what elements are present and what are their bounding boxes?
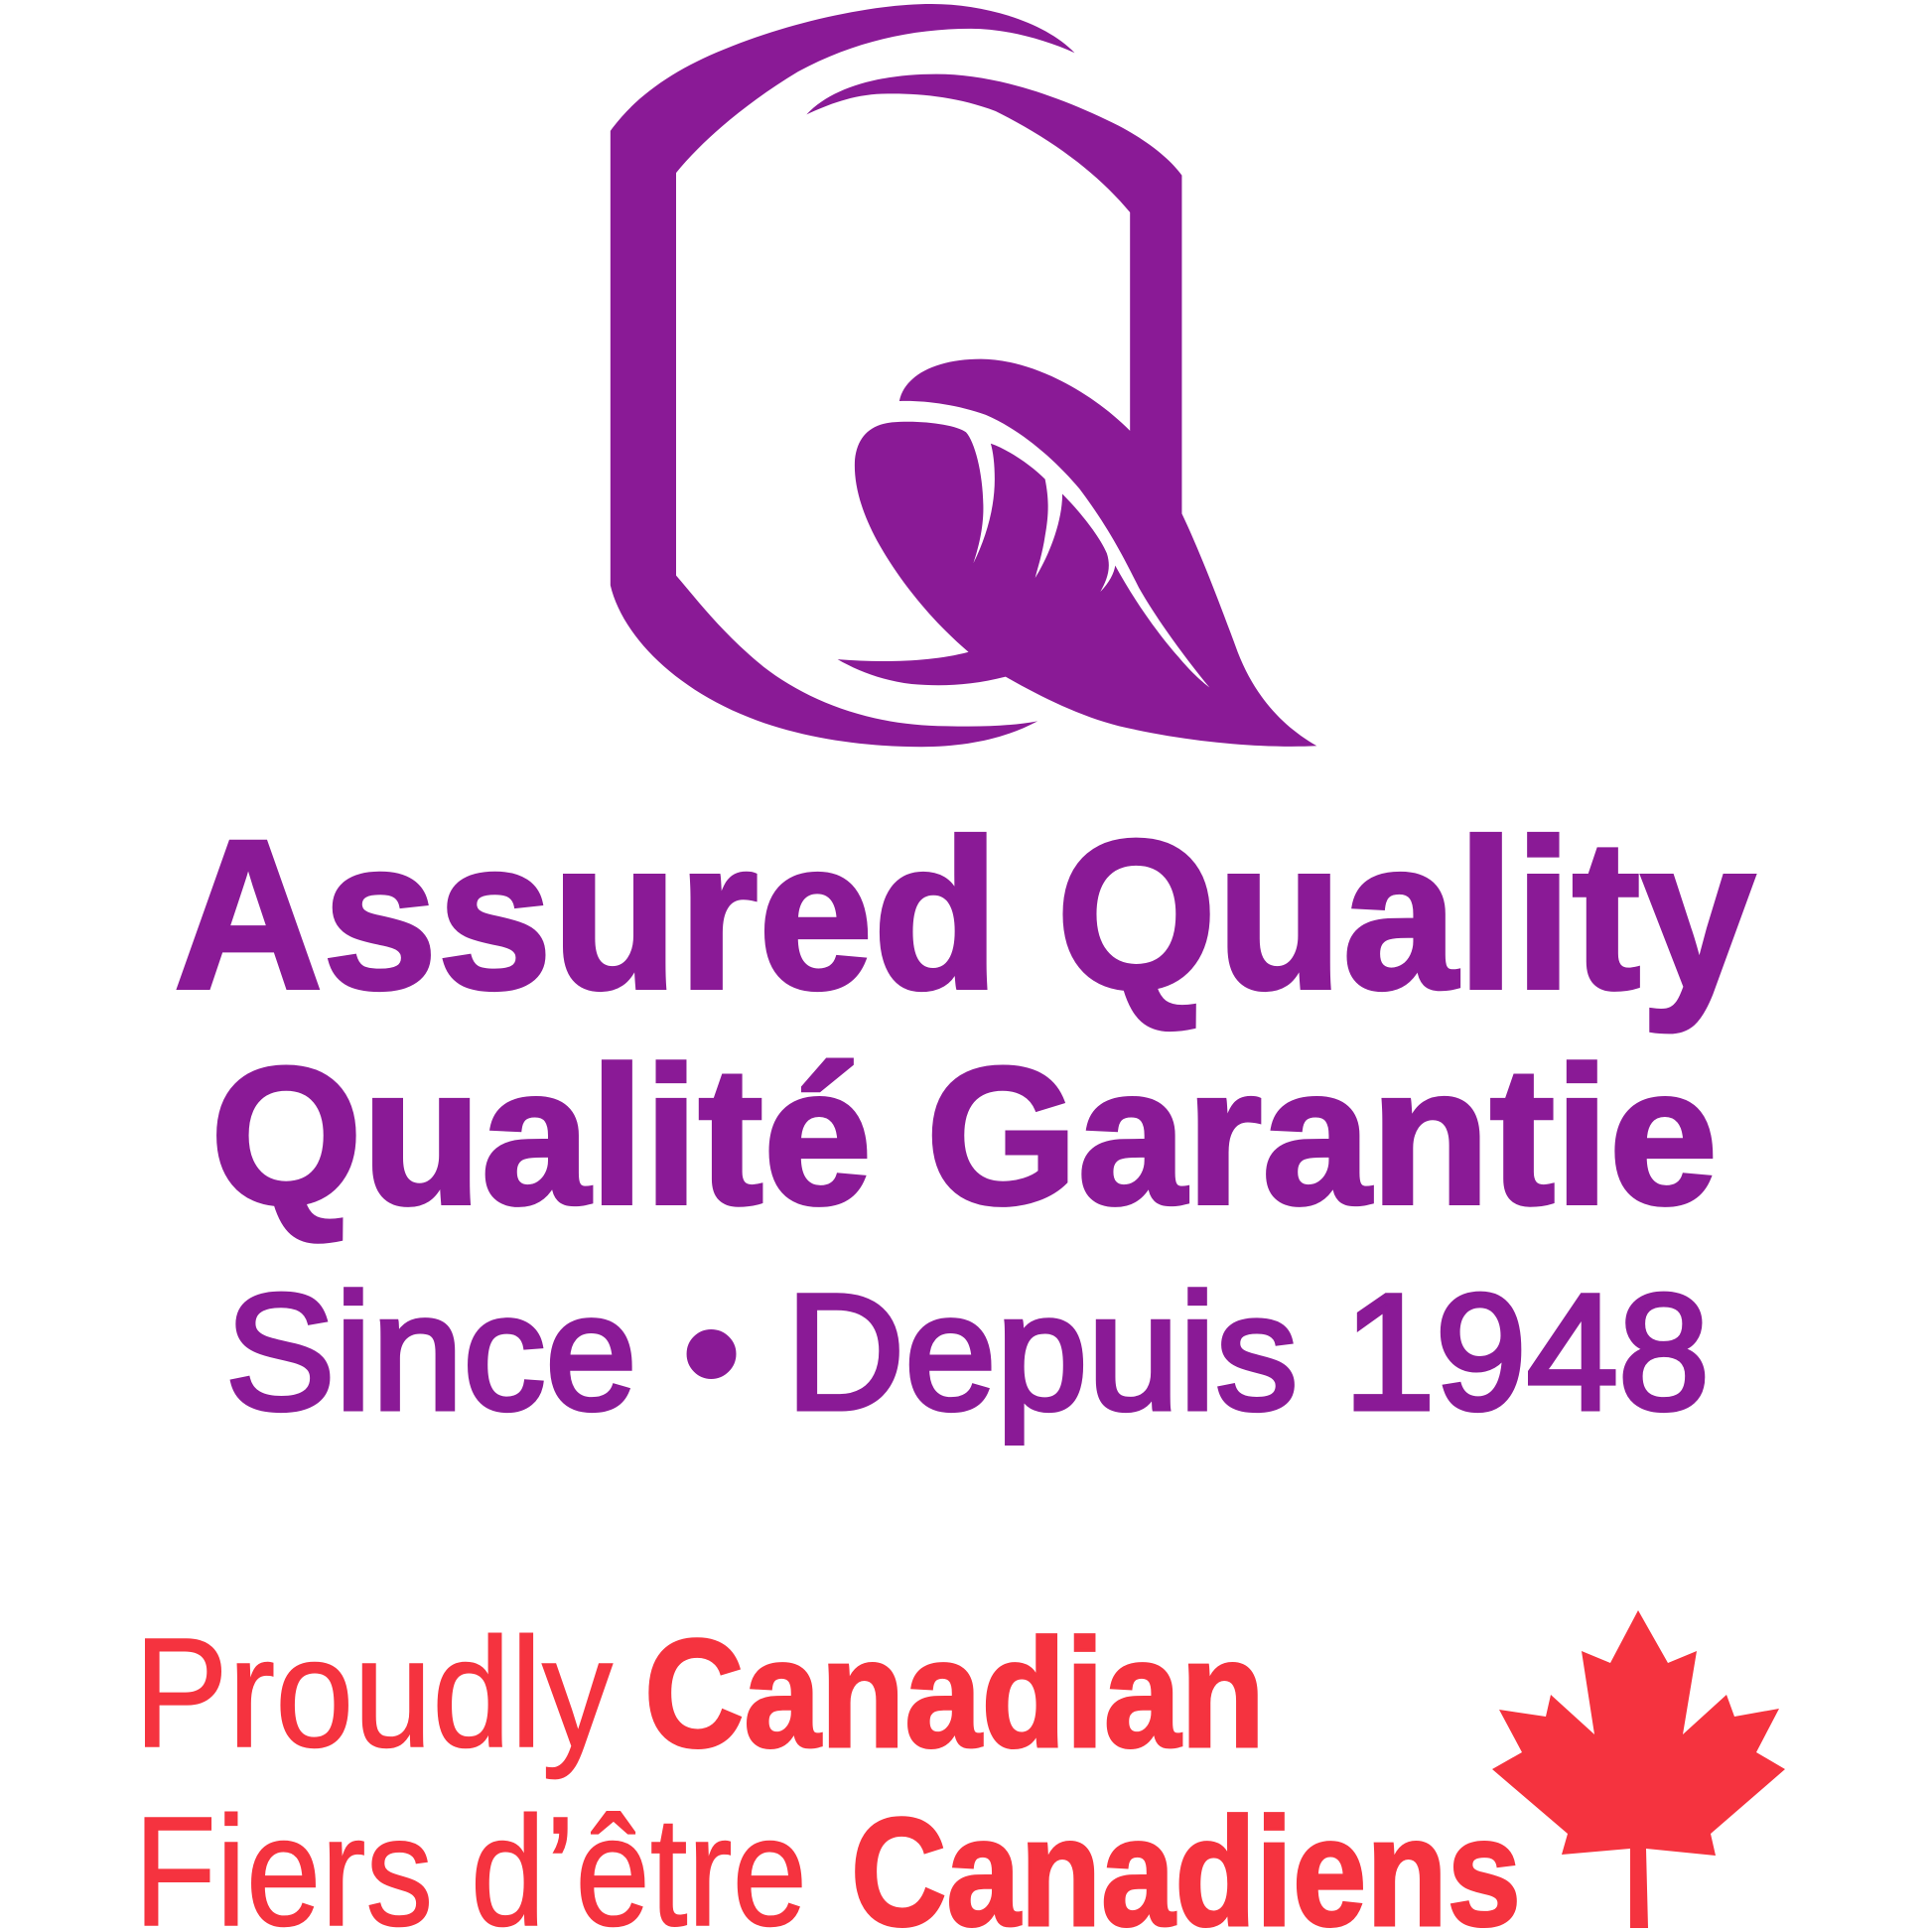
- subheading: Since Depuis 1948: Since • Depuis 1948: [225, 1261, 1710, 1445]
- text: Proudly Canadian: Proudly: [134, 1606, 613, 1780]
- icon: Q logo with leaf: [611, 4, 1316, 747]
- heading: Assured Quality: Assured Quality: [174, 796, 1755, 1034]
- text: Proudly Canadian: [134, 1606, 1265, 1780]
- icon: maple leaf: [1492, 1610, 1785, 1928]
- text: Proudly Canadian: Canadian: [644, 1607, 1265, 1779]
- text: Fiers d'être Canadiens: [134, 1785, 1521, 1932]
- heading: Qualité Garantie: Qualité Garantie: [210, 1027, 1718, 1245]
